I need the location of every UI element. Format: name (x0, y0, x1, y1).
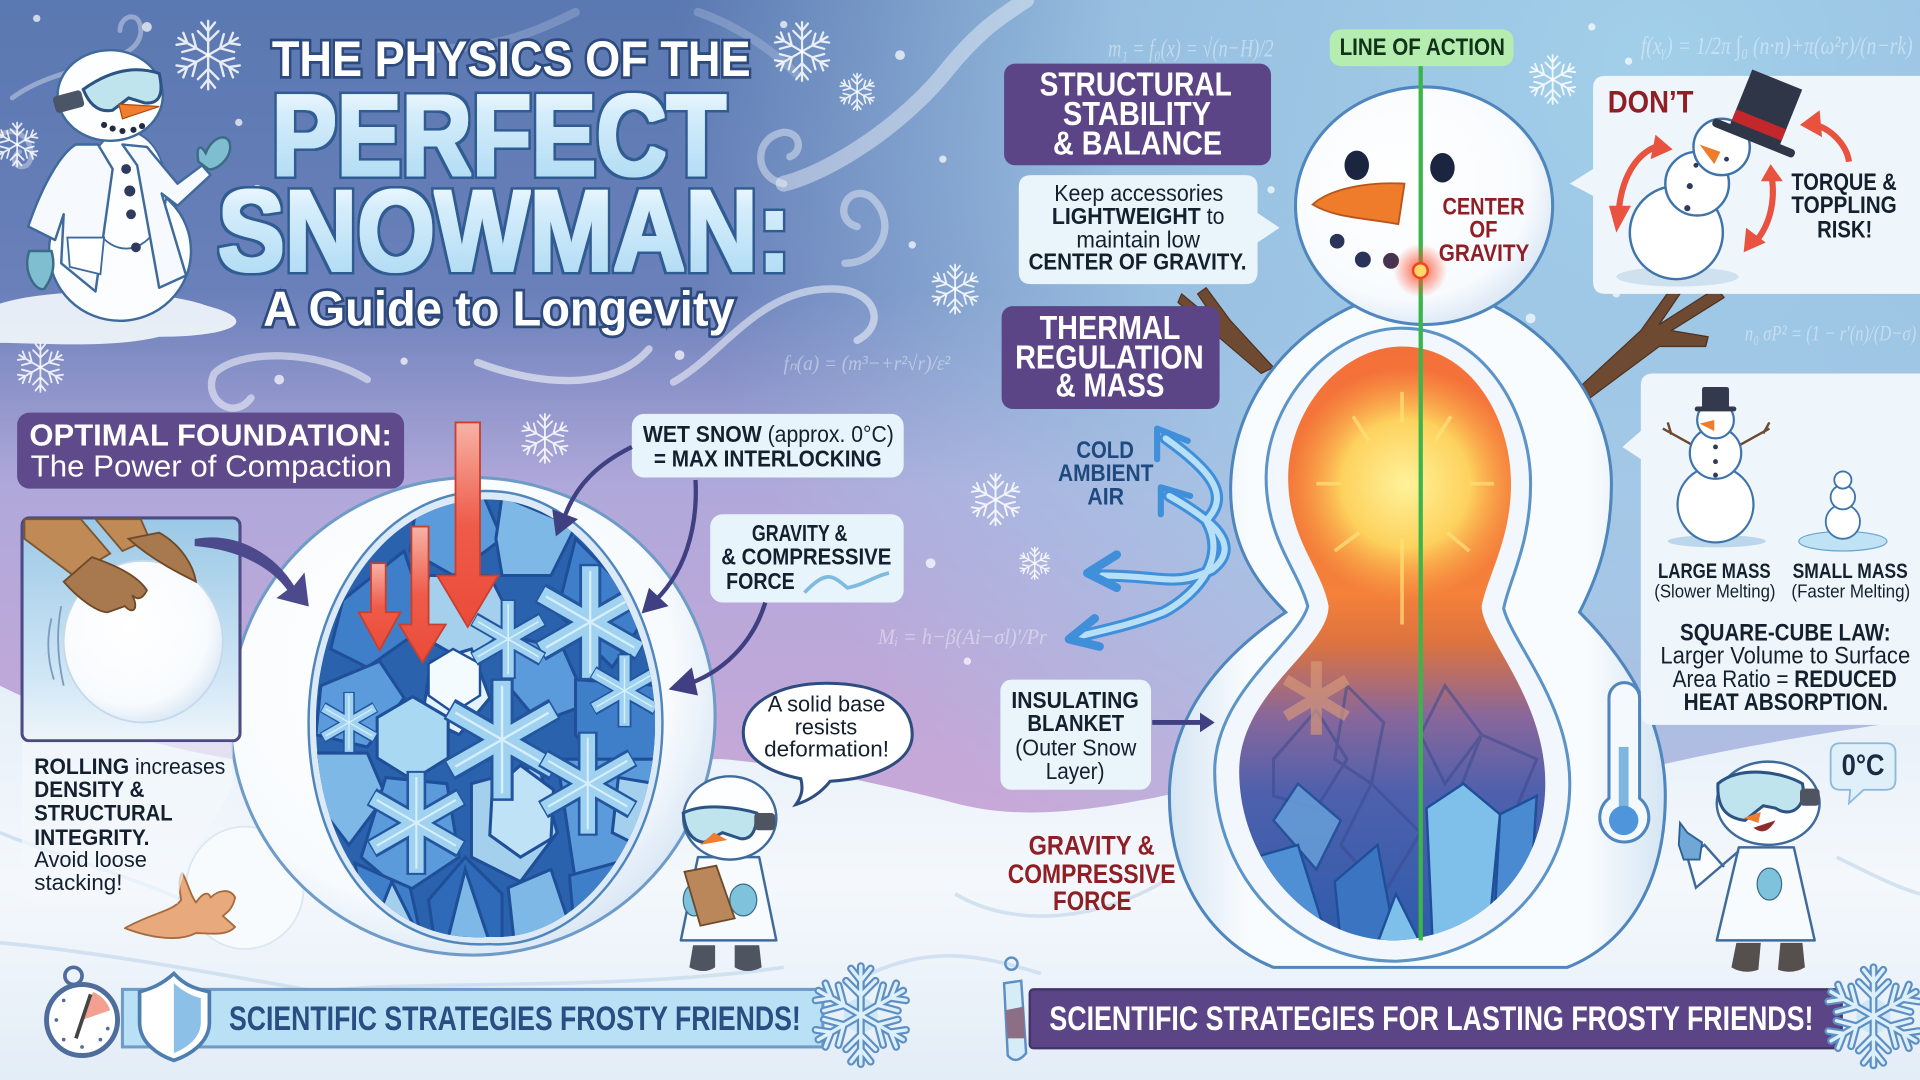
head (58, 50, 163, 141)
outer snow (230, 478, 715, 955)
icon: shield (140, 973, 209, 1060)
red arrows (1619, 125, 1849, 242)
lower body (49, 181, 191, 321)
icon: test tube (1004, 958, 1026, 1060)
heading: thermal regulation: REGULATION (1015, 340, 1204, 377)
callout: rolling: stacking! (34, 870, 122, 895)
shadow (1616, 267, 1739, 287)
heading: structural stability: STABILITY (1063, 96, 1211, 133)
panel heading: optimal foundation (17, 413, 404, 489)
red arrow heads (1609, 110, 1822, 252)
motion marks (48, 606, 64, 686)
nose (700, 833, 727, 845)
coat right (122, 144, 211, 288)
callout: zero celsius: 0°C (1842, 749, 1884, 782)
pocket (67, 238, 104, 274)
mittens (198, 137, 230, 169)
callout: lightweight accessories: CENTER OF GRAVITY. (1029, 248, 1247, 274)
callout: wet snow (632, 414, 904, 478)
ice facets (316, 496, 661, 943)
formula: middle: Mᵢ = h−β(Ai−σl)′/Pr (877, 624, 1047, 649)
warm crystal (1286, 661, 1347, 735)
panel: don't overload (1570, 63, 1920, 294)
snow layer (1215, 328, 1570, 961)
callout: rolling (22, 742, 233, 904)
callout: lightweight accessories (1019, 175, 1280, 284)
center of gravity label (1439, 193, 1529, 267)
title block (218, 31, 791, 337)
cold air arrows (1069, 429, 1225, 647)
panel: square-cube law: HEAT ABSORPTION. (1684, 689, 1888, 716)
tilted hat (1711, 63, 1818, 159)
small snowball with hand (125, 827, 304, 949)
bottom banner left (122, 989, 823, 1047)
callout: zero celsius (1831, 743, 1896, 803)
callout: rolling: Avoid loose (34, 847, 147, 872)
icon: stopwatch (47, 967, 118, 1056)
small carrot (1700, 144, 1720, 164)
small melting snowman (1799, 471, 1887, 551)
callout: lightweight accessories: Keep accessories (1054, 180, 1223, 206)
callout: wet snow: = MAX INTERLOCKING (654, 446, 882, 472)
head (1717, 762, 1820, 845)
carrot nose (1313, 183, 1404, 224)
panel heading: optimal foundation: OPTIMAL FOUNDATION: (29, 419, 392, 453)
scientist with clipboard (681, 776, 776, 971)
rolling snowball (64, 561, 223, 722)
arrow to snow layer (1152, 713, 1215, 732)
icon: thermometer (1600, 683, 1649, 842)
hexagon crystals (377, 697, 448, 780)
carrot nose (119, 104, 159, 119)
coat (1717, 847, 1815, 940)
purple callout arrows (563, 447, 765, 686)
coat left (28, 144, 113, 291)
callout: rolling: STRUCTURAL (34, 800, 173, 825)
blue crystals (1255, 784, 1537, 943)
labels mass: LARGE MASS (1658, 560, 1771, 583)
hand (125, 873, 235, 938)
boots (1731, 943, 1805, 972)
panel: square-cube law: (Slower Melting) (1654, 581, 1776, 602)
callout: lightweight accessories: maintain low (1076, 226, 1200, 252)
label: cold ambient air (1058, 437, 1154, 510)
title line 1: THE PHYSICS OF THE (272, 31, 751, 87)
heat rays (1316, 392, 1494, 624)
background snowflakes (0, 21, 1578, 579)
callout: lightweight accessories: LIGHTWEIGHT to (1052, 203, 1224, 229)
label torque: TORQUE & (1791, 169, 1897, 196)
heading: structural stability (1004, 64, 1271, 165)
heading don't: DON’T (1608, 84, 1694, 120)
speech bubble: resists (795, 715, 857, 740)
snow ground (0, 686, 1920, 1080)
title line 2: PERFECT (272, 72, 726, 200)
left arm twig (1178, 288, 1273, 373)
label: cold ambient air: AIR (1087, 483, 1124, 510)
mouth dots (1330, 234, 1344, 249)
nose and mouth (1744, 812, 1761, 823)
coat (681, 857, 776, 940)
callout: gravity and compressive force: GRAVITY & (752, 520, 848, 546)
clipboard (684, 866, 735, 926)
head (1296, 87, 1553, 324)
callout: insulating blanket (1000, 680, 1151, 790)
line of action (1330, 29, 1513, 940)
mouth dots (101, 122, 145, 134)
goggles (1718, 772, 1803, 820)
glove (1679, 823, 1702, 860)
label: cold ambient air: AMBIENT (1058, 460, 1154, 487)
panel: square-cube law: Area Ratio = REDUCED (1673, 666, 1897, 693)
gloves (64, 557, 147, 612)
facet network (1273, 686, 1537, 894)
bottom banner left: SCIENTIFIC STRATEGIES FROSTY FRIENDS! (229, 1000, 801, 1038)
arrow to snowball (196, 539, 307, 605)
inset: rolling the snowball (22, 518, 240, 741)
panel heading: optimal foundation: The Power of Compaction (31, 449, 392, 483)
callout: rolling: INTEGRITY. (34, 825, 149, 850)
speech bubble: A solid base (768, 691, 885, 716)
callout: rolling: DENSITY & (34, 777, 145, 802)
icon: snowflake right (1824, 967, 1920, 1065)
callout: gravity and compressive force: FORCE (726, 568, 795, 594)
tipping snowman (1630, 119, 1750, 279)
snow drift lines (0, 833, 1920, 992)
panel: don't overload: RISK! (1817, 217, 1872, 244)
panel: square-cube law (1622, 373, 1920, 725)
icon: snowflake left (811, 966, 911, 1064)
heat glow (1296, 374, 1511, 592)
inner rim (309, 491, 662, 944)
heading: thermal regulation (1002, 306, 1220, 409)
big snowman cross-section (1169, 87, 1665, 967)
panel: don't overload: TOPPLING (1791, 192, 1897, 219)
heading: structural stability: & BALANCE (1053, 125, 1222, 162)
scientist pointing (1679, 762, 1820, 972)
heading: thermal regulation: THERMAL (1040, 310, 1180, 347)
head (683, 776, 776, 860)
label: cold ambient air: COLD (1076, 437, 1134, 464)
label pill (1330, 29, 1513, 66)
goggles (683, 807, 757, 842)
core contents (1255, 349, 1537, 943)
callout: rolling: ROLLING increases (34, 754, 225, 779)
label: gravity and compressive force: FORCE (1053, 886, 1131, 916)
formula: under title: fₙ(a) = (m³−+r²√r)/ε² (784, 351, 951, 375)
boots (689, 945, 762, 971)
snow particles (33, 15, 1632, 763)
center of gravity label: GRAVITY (1439, 240, 1529, 267)
torso (86, 131, 167, 249)
speech bubble (743, 683, 912, 804)
eyes (1344, 151, 1369, 180)
line of action: LINE OF ACTION (1340, 34, 1505, 61)
callout: insulating blanket: (Outer Snow (1015, 735, 1137, 761)
arrow heads (1157, 429, 1190, 514)
center of gravity label: OF (1469, 217, 1498, 244)
heading: structural stability: STRUCTURAL (1040, 67, 1232, 104)
bottom banner right (1030, 989, 1842, 1048)
scientist snowman top left (0, 50, 236, 344)
heading: thermal regulation: & MASS (1056, 368, 1164, 405)
label: gravity and compressive force (1008, 831, 1176, 916)
body outline (1169, 306, 1665, 967)
mitten (1757, 868, 1782, 900)
ice core (316, 500, 656, 938)
snowman features (1684, 157, 1729, 211)
callout: insulating blanket: BLANKET (1027, 710, 1124, 736)
large snowman (1663, 387, 1769, 547)
right arm twig (1561, 288, 1724, 410)
callout: gravity and compressive force: & COMPRESSIVE (721, 543, 891, 569)
decorative swirls (0, 0, 1026, 408)
arrow heads (552, 509, 698, 696)
center of gravity marker (1393, 244, 1447, 298)
big snowball cross-section (230, 478, 715, 955)
callout: insulating blanket: Layer) (1046, 758, 1104, 784)
buttons (121, 164, 141, 252)
star crystals (540, 564, 640, 680)
subtitle: A Guide to Longevity (263, 283, 735, 337)
title line 3: SNOWMAN: (218, 168, 791, 296)
callout: wet snow: WET SNOW (approx. 0°C) (643, 421, 894, 447)
panel: square-cube law: (Faster Melting) (1791, 581, 1910, 602)
label: gravity and compressive force: GRAVITY & (1029, 831, 1155, 861)
callout: gravity and compressive force (710, 514, 904, 602)
goggles (83, 70, 161, 111)
snow mound (0, 292, 236, 344)
speech bubble: deformation! (764, 737, 889, 762)
pointing arm (1687, 845, 1739, 888)
callout: insulating blanket: INSULATING (1011, 687, 1139, 713)
compression arrows (359, 422, 498, 662)
sleeves (24, 519, 149, 576)
mittens (683, 884, 705, 916)
label: gravity and compressive force: COMPRESSIVE (1008, 859, 1176, 889)
core with gradient (1239, 347, 1545, 940)
center of gravity label: CENTER (1442, 193, 1525, 220)
squiggle (804, 573, 889, 593)
formula: top centre: m₁ = f₀(x) = √(n−H)/2 (1108, 33, 1274, 62)
